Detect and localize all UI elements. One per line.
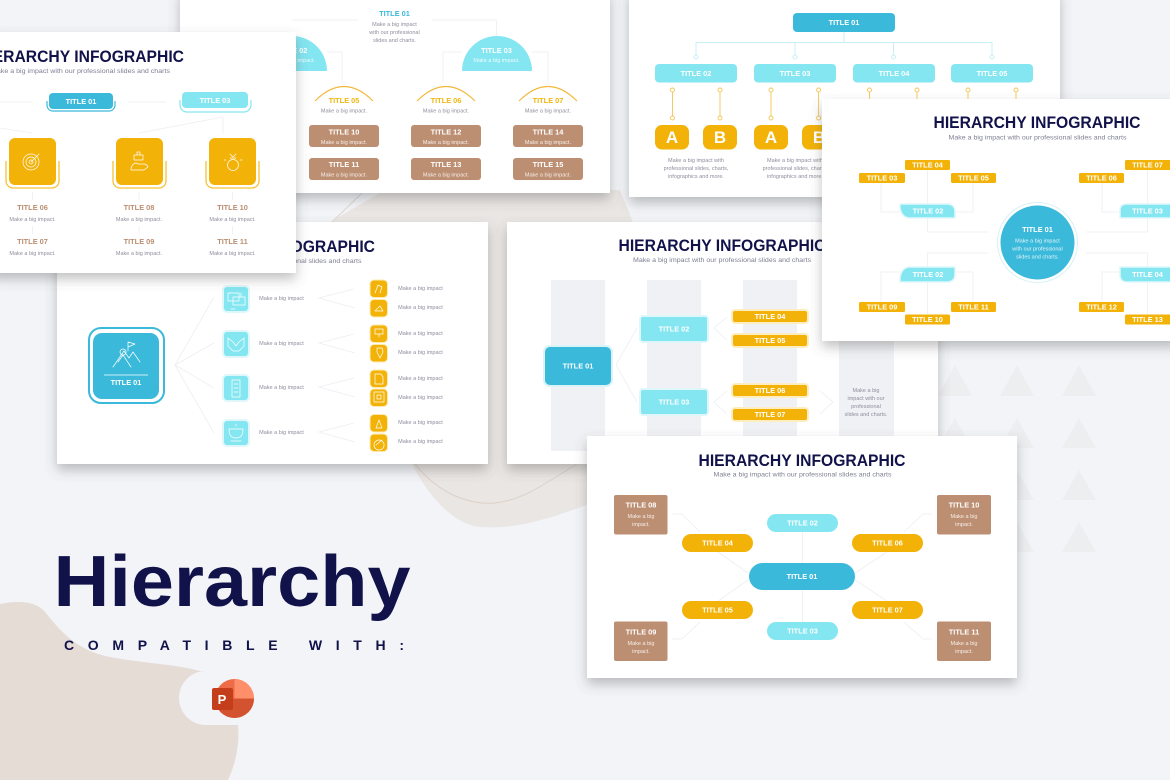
- branch 03: TITLE 03: [659, 398, 689, 406]
- level two labels: Make a big impact: [259, 430, 304, 436]
- level two labels: Make a big impact: [259, 385, 304, 391]
- tag labels: TITLE 12: [1086, 302, 1117, 312]
- panel: column hierarchy: [507, 222, 938, 464]
- level two labels: Make a big impact: [259, 341, 304, 347]
- yellow pills: [682, 534, 923, 619]
- central circle: slides and charts.: [1016, 254, 1059, 260]
- caption 1: professional slides, charts,: [664, 166, 729, 172]
- semicircle 03: Make a big impact.: [473, 58, 520, 64]
- root text: with our professional: [368, 30, 420, 36]
- tag labels: TITLE 06: [1086, 174, 1117, 182]
- lower left node: [900, 267, 955, 282]
- level two tiles: [223, 286, 249, 446]
- gray columns: [551, 280, 894, 451]
- A/B tiles: B: [714, 128, 726, 147]
- level three tiles: [370, 280, 388, 452]
- second level nodes: TITLE 02: [681, 69, 711, 78]
- subtitle: compatible with: COMPATIBLE WITH:: [64, 637, 404, 653]
- upper left node: TITLE 02: [913, 206, 943, 216]
- level three labels: Make a big impact: [398, 420, 443, 426]
- column 10 11: TITLE 11: [217, 237, 248, 246]
- yellow pills: TITLE 06: [872, 538, 903, 548]
- tag labels: TITLE 10: [912, 315, 943, 324]
- connectors: [672, 514, 932, 639]
- column 06 07: TITLE 06: [17, 203, 48, 212]
- brown box 09: [614, 622, 668, 661]
- column 10 11: [209, 203, 256, 257]
- tag labels: [867, 160, 1163, 324]
- panel: radial circle hierarchy: [822, 99, 1170, 341]
- central pill: [749, 563, 855, 590]
- arc column 07: TITLE 15: [533, 160, 563, 169]
- subheading: Make a big impact with our professional slides and charts: [182, 258, 362, 265]
- brown box 10: [937, 495, 991, 534]
- caption 2: Make a big impact with: [767, 158, 823, 164]
- branch 03: [640, 389, 708, 415]
- branch 02: TITLE 02: [659, 324, 689, 334]
- root node: [544, 346, 612, 386]
- tag labels: TITLE 04: [912, 160, 944, 170]
- arc column 05: TITLE 10: [329, 128, 359, 136]
- level three labels: Make a big impact: [398, 286, 443, 292]
- corner blob: [0, 602, 238, 780]
- leaf nodes: [732, 310, 808, 421]
- column 10 11: Make a big impact.: [209, 251, 256, 257]
- tag labels: TITLE 09: [867, 302, 897, 312]
- yellow tags: [859, 160, 1170, 324]
- branch 02: [640, 316, 708, 342]
- brown box 08: Make a big: [628, 514, 654, 520]
- second level nodes: TITLE 03: [780, 69, 810, 78]
- yellow pills: TITLE 04: [702, 538, 734, 548]
- yellow pills: TITLE 07: [872, 606, 903, 614]
- connectors: [881, 169, 1148, 314]
- brown box 08: impact.: [632, 522, 650, 528]
- arc column 05: Make a big impact.: [321, 172, 368, 178]
- caption 2: infographics and more.: [767, 174, 823, 180]
- node 03: TITLE 03: [200, 96, 230, 105]
- second level nodes: [655, 64, 1033, 82]
- tile: target: [6, 138, 59, 188]
- second level nodes: TITLE 04: [879, 69, 910, 78]
- tile: money bag: [206, 138, 259, 188]
- root text: TITLE 01: [379, 9, 410, 18]
- heading: HIERARCHY INFOGRAPHIC: [934, 113, 1140, 132]
- column 06 07: [9, 203, 56, 257]
- brown box 11: impact.: [955, 649, 973, 655]
- big title: Hierarchy: [54, 542, 410, 622]
- column 06 07: TITLE 07: [17, 237, 48, 246]
- brown box 08: [614, 495, 668, 534]
- level three labels: Make a big impact: [398, 395, 443, 401]
- arc column 07: Make a big impact.: [525, 108, 572, 114]
- arc column 07: Make a big impact.: [525, 140, 572, 146]
- semicircle 03: [462, 36, 532, 71]
- connectors: [175, 289, 355, 442]
- brown box 11: [937, 622, 991, 661]
- lower right node: TITLE 04: [1132, 270, 1164, 279]
- triangle pattern: [938, 365, 1096, 552]
- heading: HIERARCHY INFOGRAPHIC: [618, 236, 826, 255]
- level three labels: [398, 286, 443, 445]
- brown box 10: Make a big: [951, 514, 977, 520]
- node 01: TITLE 01: [66, 97, 96, 106]
- brown box 09: impact.: [632, 649, 650, 655]
- brown box 08: TITLE 08: [626, 500, 656, 510]
- arc column 05: TITLE 11: [329, 160, 359, 169]
- PowerPoint badge: P: [218, 692, 227, 707]
- root node: TITLE 01: [829, 18, 859, 27]
- panel: org tree A/B: [629, 0, 1060, 197]
- arc column 06: Make a big impact.: [423, 108, 470, 114]
- tag labels: TITLE 11: [958, 302, 989, 312]
- brown box 10: impact.: [955, 522, 973, 528]
- root text: slides and charts.: [373, 38, 416, 44]
- A/B tiles: A: [666, 128, 678, 147]
- tag labels: TITLE 13: [1132, 315, 1163, 324]
- node 03: [180, 92, 251, 112]
- connectors: [0, 102, 232, 234]
- upper left node: [900, 204, 955, 218]
- column caption: slides and charts.: [845, 412, 888, 418]
- tag labels: TITLE 03: [867, 174, 897, 182]
- caption 2: [763, 158, 828, 180]
- root tile: [89, 328, 164, 403]
- column 06 07: Make a big impact.: [9, 217, 56, 223]
- arc column 06: TITLE 06: [431, 96, 461, 105]
- column 10 11: TITLE 10: [217, 203, 248, 212]
- arc column 07: TITLE 07: [533, 96, 563, 105]
- column caption: Make a big: [853, 388, 879, 394]
- arc column 05: Make a big impact.: [321, 140, 368, 146]
- tile: hand: [113, 138, 166, 188]
- second level nodes: TITLE 05: [977, 69, 1007, 78]
- central circle: Make a big impact: [1015, 238, 1060, 244]
- leaf nodes: TITLE 07: [755, 410, 785, 419]
- tag labels: TITLE 05: [958, 174, 989, 182]
- column 08 09: Make a big impact.: [116, 217, 163, 223]
- brown box 11: TITLE 11: [949, 628, 979, 636]
- tag labels: TITLE 07: [1132, 160, 1163, 170]
- brown box 10: TITLE 10: [949, 500, 979, 510]
- leaf nodes: TITLE 04: [755, 312, 786, 321]
- arc column 07: TITLE 14: [533, 128, 564, 136]
- lower right node: [1120, 267, 1170, 282]
- level two labels: Make a big impact: [259, 296, 304, 302]
- central circle: [998, 202, 1078, 282]
- panel: mind map hierarchy: [587, 436, 1017, 678]
- upper right node: [1120, 204, 1170, 218]
- semicircle 02: Make a big impact.: [269, 58, 316, 64]
- root tile: TITLE 01: [111, 378, 141, 387]
- level two labels: [259, 296, 304, 436]
- arc column 06: Make a big impact.: [423, 140, 470, 146]
- column 08 09: TITLE 09: [124, 237, 154, 246]
- cyan pills: TITLE 03: [787, 626, 818, 636]
- arc column 05: [309, 86, 379, 180]
- upper right node: TITLE 03: [1132, 206, 1163, 216]
- heading: HIERARCHY INFOGRAPHIC: [168, 237, 375, 256]
- decorative beige swirl: [330, 190, 640, 527]
- arc column 07: Make a big impact.: [525, 172, 572, 178]
- leaf nodes: TITLE 06: [755, 386, 785, 395]
- level three labels: Make a big impact: [398, 439, 443, 445]
- arc column 05: TITLE 05: [329, 96, 359, 105]
- level three labels: Make a big impact: [398, 350, 443, 356]
- brown box 11: Make a big: [951, 641, 977, 647]
- semicircle 02: TITLE 02: [277, 46, 307, 55]
- leaf nodes: TITLE 05: [755, 336, 785, 345]
- central circle: TITLE 01: [1022, 225, 1053, 234]
- level three labels: Make a big impact: [398, 331, 443, 337]
- root text: [368, 9, 420, 44]
- caption 2: professional slides, charts,: [763, 166, 828, 172]
- root text: Make a big impact: [372, 22, 417, 28]
- root node: [793, 13, 895, 32]
- panel: semicircle tree: [180, 0, 610, 193]
- level three labels: Make a big impact: [398, 376, 443, 382]
- PowerPoint badge: [179, 671, 269, 725]
- arc column 06: TITLE 12: [431, 128, 461, 136]
- subheading: Make a big impact with our professional slides and charts: [714, 472, 892, 478]
- column 10 11: Make a big impact.: [209, 217, 256, 223]
- lower left node: TITLE 02: [913, 270, 943, 279]
- semicircle 02: [257, 36, 327, 71]
- caption 1: infographics and more.: [668, 174, 724, 180]
- A/B tiles: A: [765, 128, 777, 147]
- arc column 05: Make a big impact.: [321, 108, 368, 114]
- level three labels: Make a big impact: [398, 305, 443, 311]
- arc column 07: [513, 86, 583, 180]
- connectors: [694, 32, 994, 59]
- brown box 09: TITLE 09: [626, 628, 656, 636]
- brown box 09: Make a big: [628, 641, 654, 647]
- A/B tiles: B: [813, 128, 825, 147]
- arc column 06: [411, 86, 481, 180]
- column caption: impact with our: [848, 396, 885, 402]
- connectors: [616, 317, 833, 414]
- caption 1: [664, 158, 729, 180]
- panel: yellow tile hierarchy: [0, 32, 296, 273]
- central pill: TITLE 01: [787, 572, 817, 581]
- column caption: professional: [851, 404, 881, 410]
- column 08 09: Make a big impact.: [116, 251, 163, 257]
- column caption: [845, 388, 888, 418]
- root node: TITLE 01: [563, 362, 593, 370]
- yellow pins: [670, 88, 1018, 120]
- level two icons: [228, 293, 245, 441]
- central circle: with our professional: [1011, 246, 1063, 252]
- yellow pills: TITLE 05: [702, 606, 733, 614]
- column 08 09: [116, 203, 163, 257]
- subheading: Make a big impact with our professional slides and charts: [633, 257, 812, 264]
- caption 1: Make a big impact with: [668, 158, 724, 164]
- node 01: [47, 93, 115, 111]
- arc column 06: Make a big impact.: [423, 172, 470, 178]
- panel: icon hierarchy: [57, 222, 488, 464]
- heading: HIERARCHY INFOGRAPHIC: [698, 451, 906, 470]
- level three icons: [374, 285, 384, 450]
- column 06 07: Make a big impact.: [9, 251, 56, 257]
- column 08 09: TITLE 08: [124, 203, 154, 212]
- cyan pills: [767, 514, 838, 640]
- subheading: Make a big impact with our professional slides and charts: [948, 134, 1127, 142]
- A/B tiles: [655, 125, 836, 150]
- semicircle 03: TITLE 03: [481, 46, 512, 55]
- cyan pills: TITLE 02: [787, 518, 818, 528]
- arc column 06: TITLE 13: [431, 160, 461, 169]
